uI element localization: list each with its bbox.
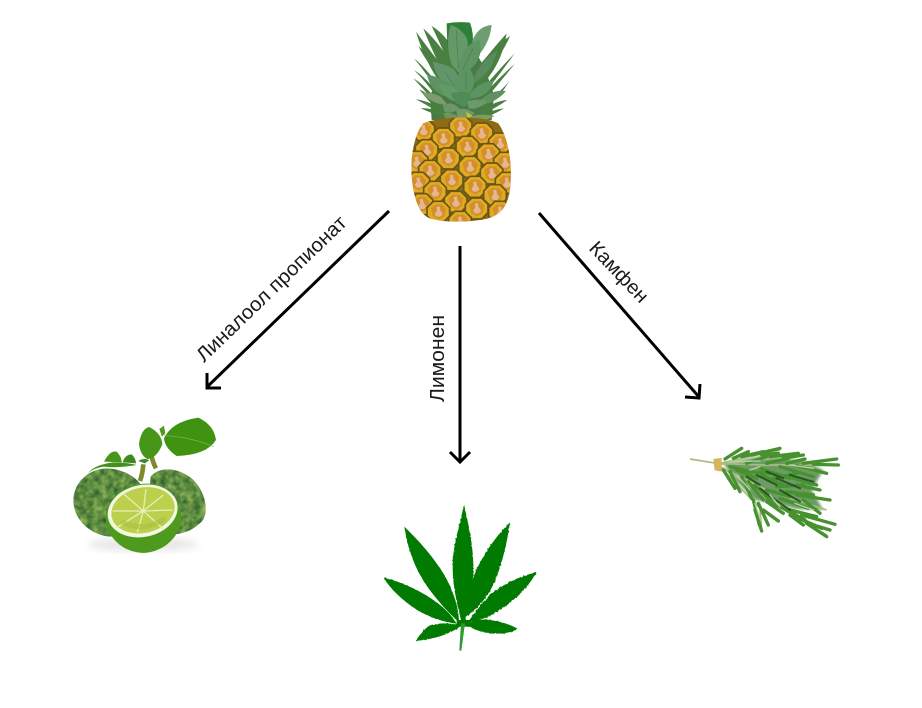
pineapple crown — [413, 22, 515, 121]
needles — [723, 448, 838, 537]
kaffir lime — [70, 418, 216, 553]
arrow: pineapple to rosemary — [539, 213, 700, 398]
top leaflet — [453, 504, 473, 620]
stems — [690, 450, 837, 535]
lower right leaflet — [466, 620, 518, 634]
label: camphene: Камфен — [584, 237, 653, 308]
lower left leaflet — [416, 623, 461, 641]
pineapple — [411, 22, 514, 222]
left leaflet — [383, 577, 457, 624]
foliage mass — [723, 456, 823, 510]
stems — [140, 457, 156, 481]
arrow: pineapple to cannabis — [450, 246, 470, 462]
label: limonene: Лимонен — [427, 315, 449, 402]
twine — [713, 458, 722, 472]
back leaf — [447, 22, 473, 67]
cannabis leaf — [383, 504, 537, 651]
arrow: pineapple to kaffir lime — [207, 211, 389, 388]
rosemary — [690, 448, 838, 537]
shadow — [88, 537, 198, 552]
upper right leaflet — [466, 522, 510, 617]
cut lime — [103, 478, 183, 553]
leaves — [164, 418, 216, 456]
left fruit — [73, 468, 140, 537]
upper left leaflet — [404, 527, 459, 622]
right leaflet — [468, 572, 537, 622]
right fruit — [150, 469, 206, 534]
leaf centre — [457, 620, 470, 627]
label: linalool propionate: Линалоол пропионат — [192, 212, 351, 367]
crown base mass — [430, 45, 494, 120]
pineapple body — [411, 118, 511, 222]
stem — [459, 623, 465, 651]
